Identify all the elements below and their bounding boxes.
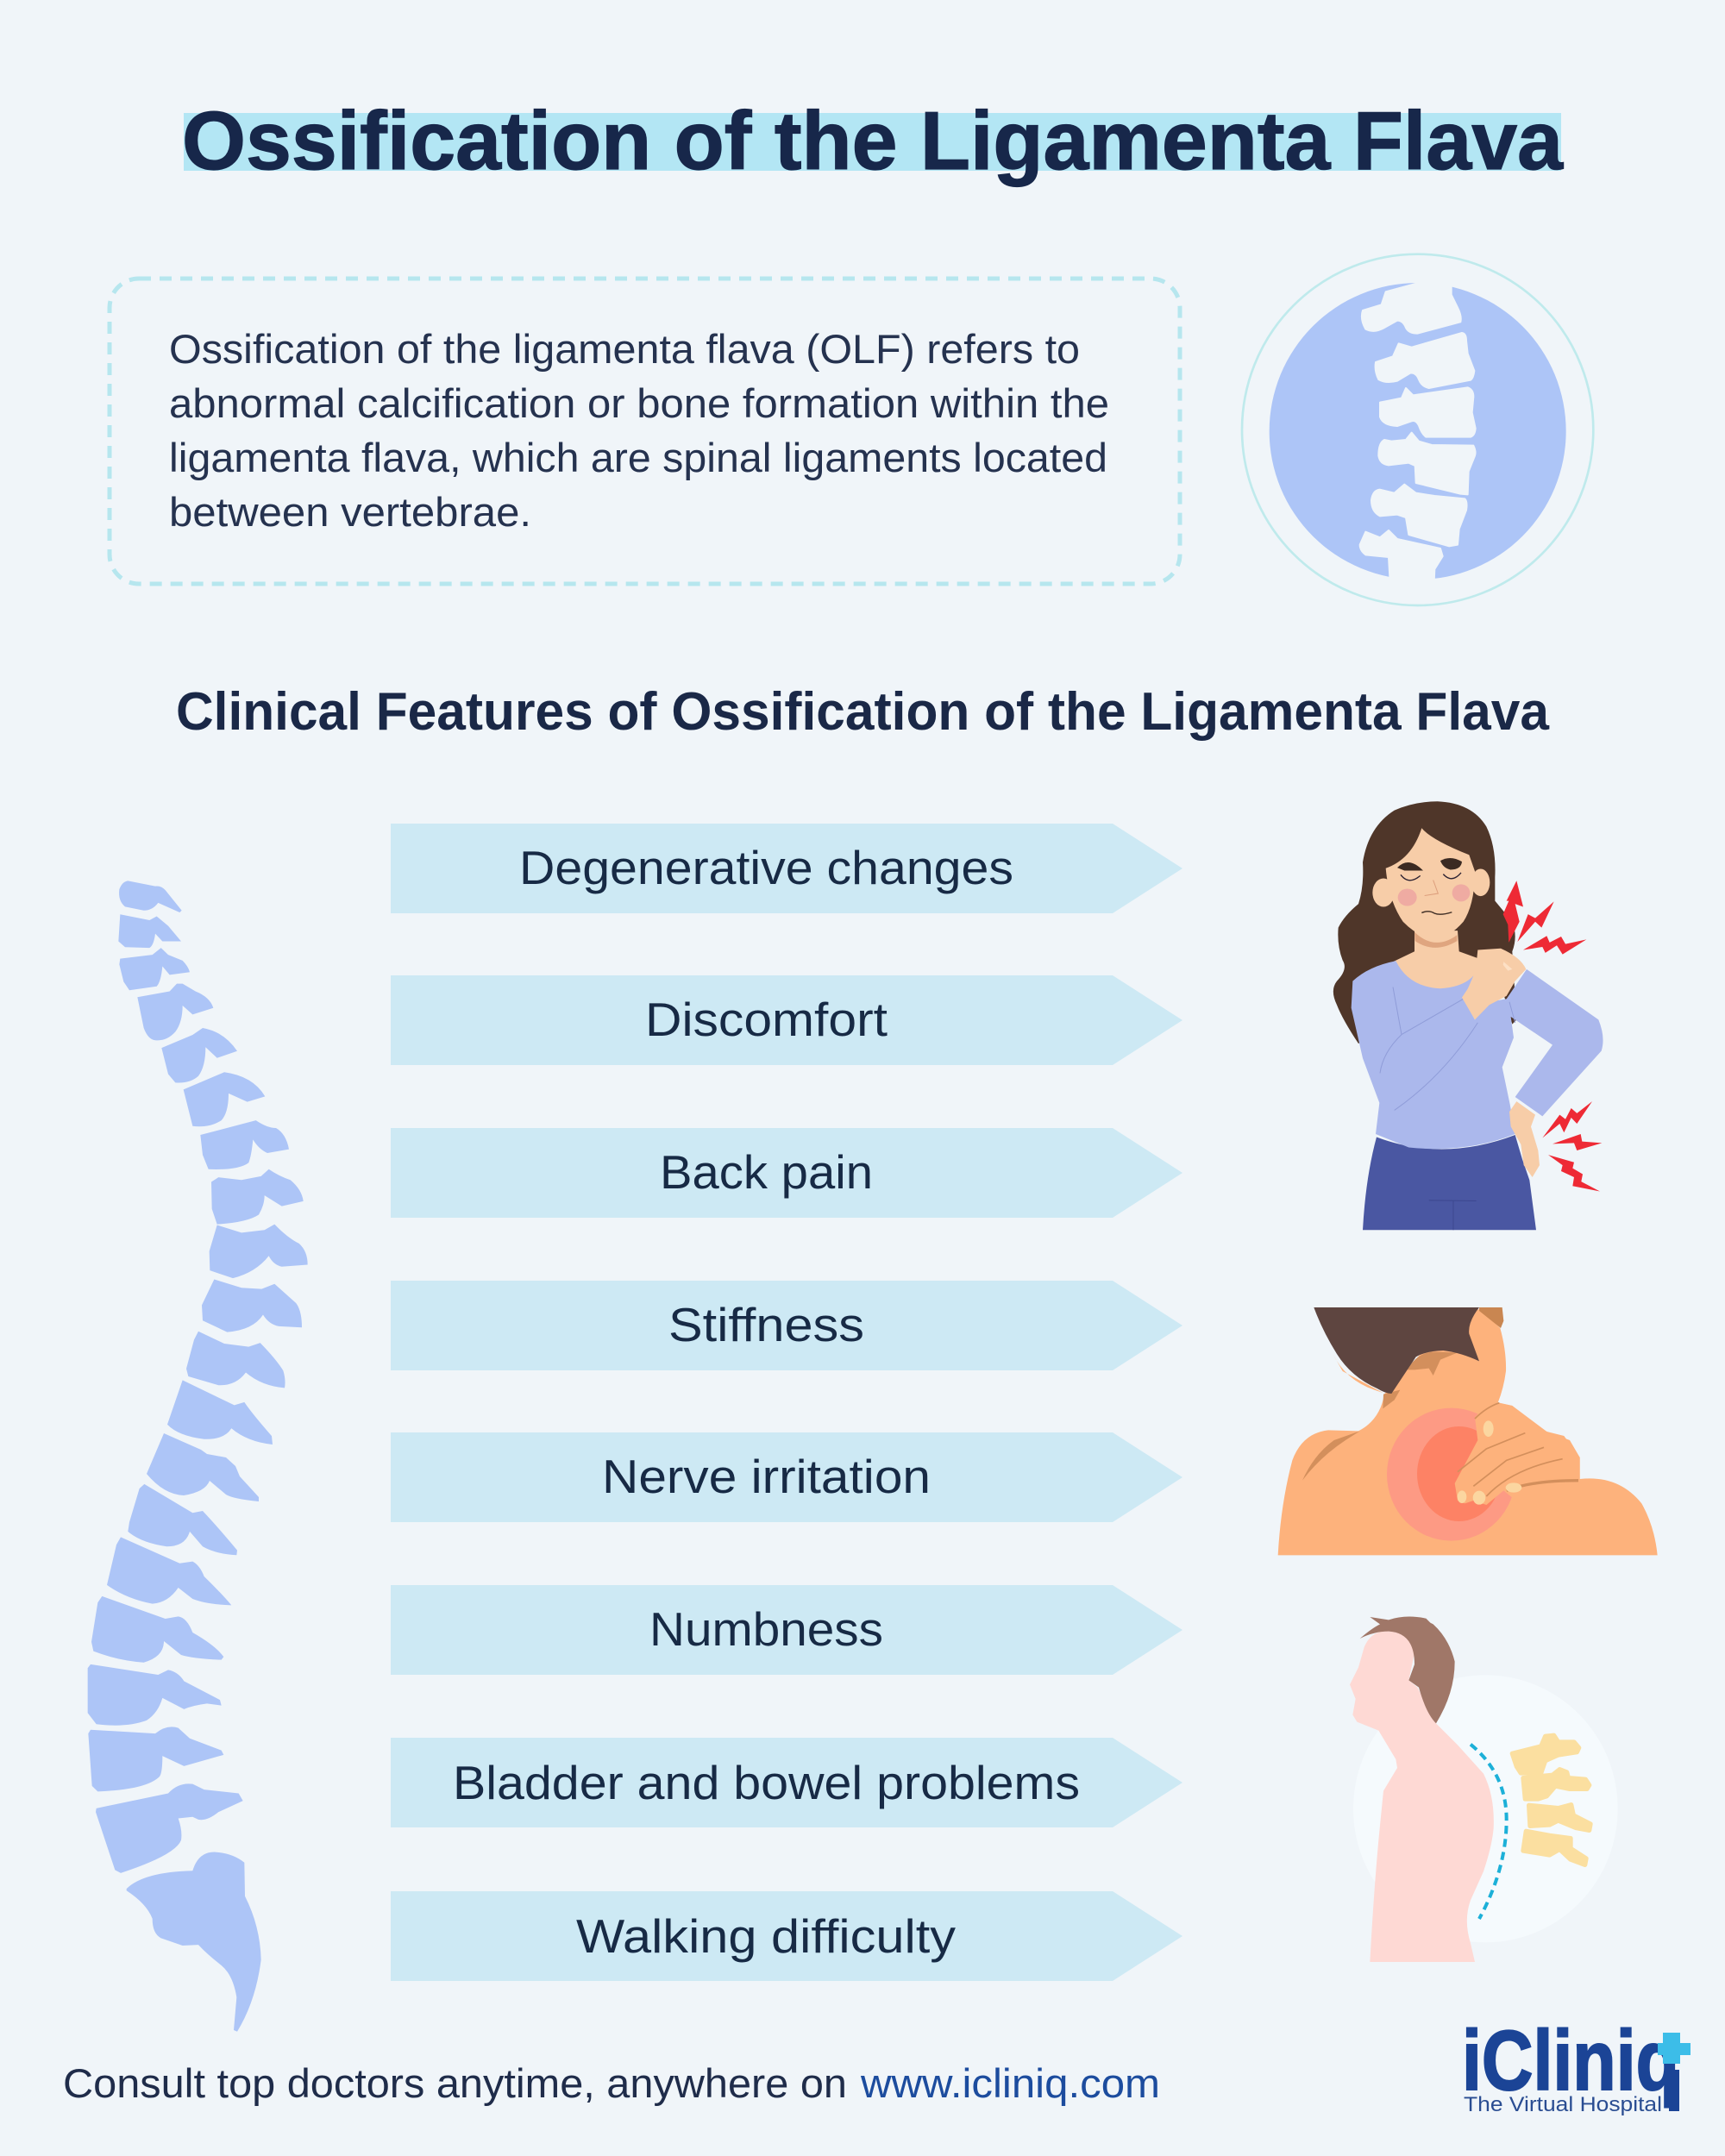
arrow: numbness [391, 1585, 1182, 1675]
icon: spine in circle [1242, 254, 1593, 605]
icon: plus sign [1658, 2033, 1690, 2064]
icon: q descender [1669, 2070, 1679, 2111]
text block: definition: abnormal calcification or bone formation within the [169, 380, 1109, 426]
arrow: stiffness: Stiffness [668, 1298, 864, 1351]
illustration: neck and shoulder pain [1278, 1307, 1658, 1555]
footer: call to action [63, 2060, 1160, 2106]
arrow: degenerative changes [391, 824, 1182, 913]
logo: iCliniq: iCliniq [1462, 2013, 1679, 2108]
arrow: nerve irritation [391, 1432, 1182, 1522]
arrow: discomfort: Discomfort [645, 993, 888, 1046]
arrow: back pain: Back pain [660, 1145, 873, 1199]
text block: definition [169, 326, 1109, 535]
arrow: walking difficulty [391, 1891, 1182, 1981]
footer: call to action: www.icliniq.com [860, 2060, 1160, 2106]
arrow: stiffness [391, 1281, 1182, 1370]
illustration: woman with shoulder and back pain [1333, 801, 1603, 1230]
footer: call to action: Consult top doctors anytime, anywhere on [63, 2060, 847, 2106]
arrow: nerve irritation: Nerve irritation [602, 1450, 931, 1503]
arrow: discomfort [391, 975, 1182, 1065]
text block: definition: between vertebrae. [169, 489, 531, 535]
arrow: walking difficulty: Walking difficulty [576, 1909, 957, 1963]
arrows: clinical features list [391, 824, 1182, 1981]
title: Ossification of the Ligamenta Flava [182, 95, 1564, 187]
arrow: degenerative changes: Degenerative changes [519, 841, 1013, 894]
arrow: back pain [391, 1128, 1182, 1218]
panel: definition text box [110, 279, 1180, 584]
text block: definition: Ossification of the ligamenta flava (OLF) refers to [169, 326, 1080, 372]
text block: definition: ligamenta flava, which are spinal ligaments located [169, 435, 1107, 480]
arrow: bladder and bowel problems [391, 1738, 1182, 1827]
illustration: lateral spine column [88, 881, 308, 2032]
tagline: The Virtual Hospital [1464, 2093, 1662, 2116]
illustration: man with curved spine [1350, 1617, 1618, 1962]
arrow: bladder and bowel problems: Bladder and bowel problems [453, 1756, 1080, 1809]
heading: clinical features: Clinical Features of Ossification of the Ligamenta Flava [176, 682, 1549, 742]
arrow: numbness: Numbness [649, 1602, 883, 1656]
